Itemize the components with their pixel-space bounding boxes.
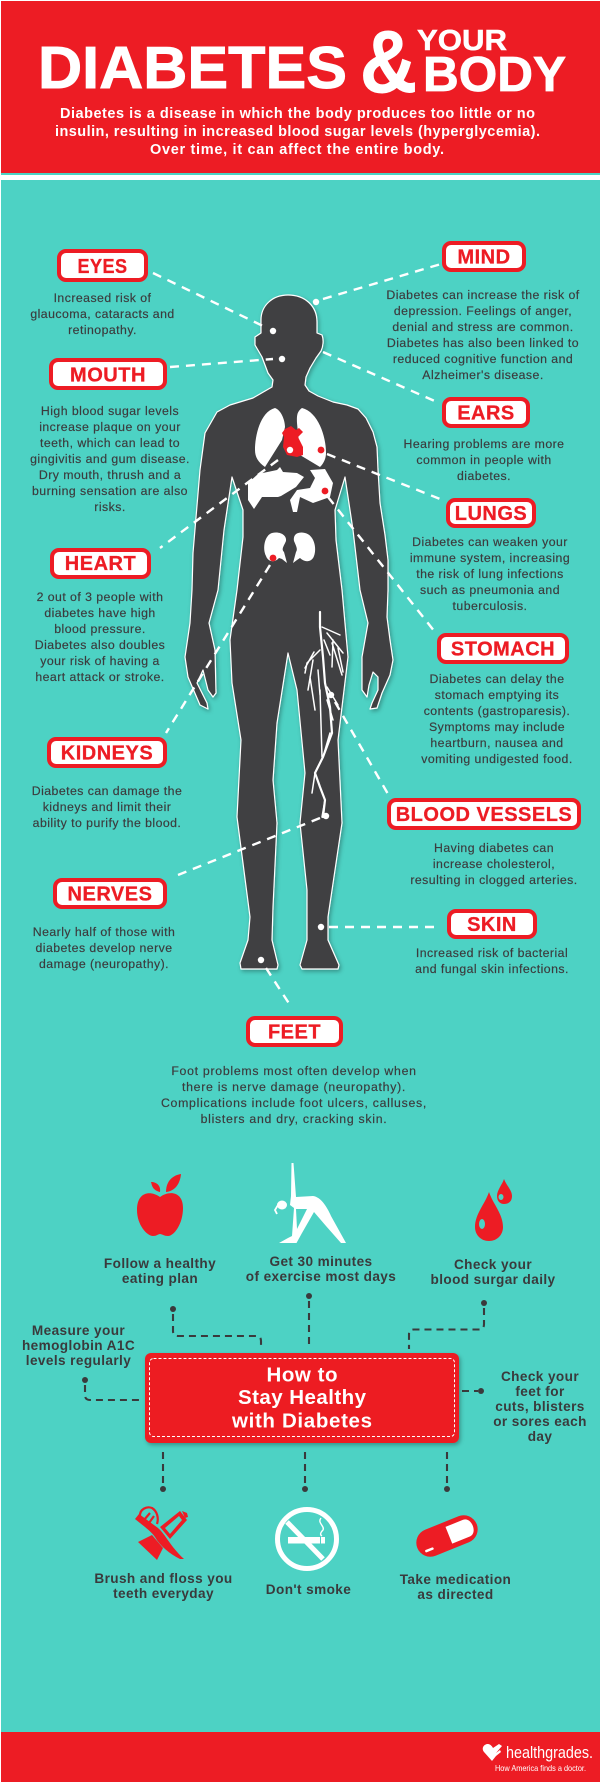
eyes: EYES bbox=[78, 256, 128, 278]
don't smoke text: Don't smoke bbox=[266, 1582, 351, 1597]
blood sugar text: blood surgar daily bbox=[430, 1272, 556, 1287]
nerves: diabetes develop nerve bbox=[35, 941, 173, 955]
mouth: teeth, which can lead to bbox=[40, 436, 180, 450]
lungs bbox=[410, 500, 570, 613]
feet check text: cuts, blisters bbox=[495, 1399, 585, 1414]
heart: your risk of having a bbox=[40, 654, 160, 668]
blood vessels: resulting in clogged arteries. bbox=[410, 873, 578, 887]
feet: FEET bbox=[268, 1022, 321, 1044]
eyes: retinopathy. bbox=[68, 323, 137, 337]
stomach: heartburn, nausea and bbox=[430, 736, 564, 750]
A1C text: levels regularly bbox=[26, 1353, 131, 1368]
heart bbox=[282, 426, 303, 457]
nerves bbox=[33, 880, 175, 971]
feet check text: or sores each bbox=[493, 1414, 587, 1429]
title: BODY bbox=[423, 48, 566, 102]
mouth bbox=[30, 360, 190, 514]
lungs: immune system, increasing bbox=[410, 551, 570, 565]
kidneys bbox=[264, 533, 315, 563]
lungs: such as pneumonia and bbox=[420, 583, 560, 597]
lungs bbox=[255, 408, 326, 467]
icon: toothbrush and toothpaste bbox=[135, 1507, 188, 1560]
feet check text: day bbox=[528, 1429, 552, 1444]
healthy eating text: Follow a healthy bbox=[104, 1256, 216, 1271]
blood vessels: BLOOD VESSELS bbox=[396, 804, 572, 826]
mind: depression. Feelings of anger, bbox=[394, 304, 572, 318]
title: & bbox=[360, 12, 417, 111]
mind: denial and stress are common. bbox=[392, 320, 574, 334]
mouth: gingivitis and gum disease. bbox=[30, 452, 190, 466]
skin bbox=[415, 911, 569, 976]
mouth: Dry mouth, thrush and a bbox=[39, 468, 181, 482]
ears: diabetes. bbox=[457, 469, 511, 483]
title bbox=[38, 12, 566, 111]
blood vessels: Having diabetes can bbox=[434, 841, 554, 855]
mind: Diabetes can increase the risk of bbox=[386, 288, 580, 302]
feet check text: feet for bbox=[515, 1384, 565, 1399]
footer bbox=[1, 1732, 600, 1782]
feet bbox=[161, 1018, 427, 1126]
mouth: burning sensation are also bbox=[32, 484, 188, 498]
medication text: Take medication bbox=[400, 1572, 511, 1587]
feet: Foot problems most often develop when bbox=[171, 1064, 417, 1078]
heart: HEART bbox=[65, 553, 136, 575]
icon: pill bbox=[412, 1511, 482, 1561]
heart: diabetes have high bbox=[44, 606, 156, 620]
ears: EARS bbox=[457, 402, 515, 424]
nerves: NERVES bbox=[68, 884, 152, 906]
A1C text: Measure your bbox=[32, 1323, 125, 1338]
icon: apple bbox=[137, 1174, 183, 1236]
nerves: Nearly half of those with bbox=[33, 925, 175, 939]
stomach: contents (gastroparesis). bbox=[424, 704, 570, 718]
blood vessels: increase cholesterol, bbox=[433, 857, 555, 871]
logo: How America finds a doctor. bbox=[495, 1763, 586, 1773]
heart: Diabetes also doubles bbox=[35, 638, 165, 652]
mouth: MOUTH bbox=[70, 364, 146, 386]
stomach: STOMACH bbox=[451, 638, 555, 660]
header bbox=[1, 1, 600, 180]
feet: there is nerve damage (neuropathy). bbox=[182, 1080, 406, 1094]
lungs: the risk of lung infections bbox=[416, 567, 564, 581]
title: DIABETES bbox=[38, 35, 347, 101]
eyes: Increased risk of bbox=[54, 291, 152, 305]
lungs: LUNGS bbox=[455, 503, 527, 525]
mind: reduced cognitive function and bbox=[393, 352, 573, 366]
feet check text: Check your bbox=[501, 1369, 579, 1384]
heart: heart attack or stroke. bbox=[35, 670, 165, 684]
body figure bbox=[185, 295, 393, 969]
marker dots bbox=[258, 299, 334, 963]
intro text: Diabetes is a disease in which the body produces too little or no bbox=[60, 106, 535, 122]
kidneys bbox=[32, 739, 182, 830]
mouth: High blood sugar levels bbox=[41, 404, 179, 418]
mouth: increase plaque on your bbox=[39, 420, 181, 434]
stomach bbox=[290, 469, 333, 512]
lungs: tuberculosis. bbox=[453, 599, 527, 613]
intro text: Over time, it can affect the entire body. bbox=[150, 142, 444, 158]
kidneys: KIDNEYS bbox=[61, 742, 153, 764]
mind: Alzheimer's disease. bbox=[422, 368, 544, 382]
kidneys: kidneys and limit their bbox=[43, 800, 171, 814]
kidneys: Diabetes can damage the bbox=[32, 784, 182, 798]
stomach: vomiting undigested food. bbox=[421, 752, 573, 766]
ears: Hearing problems are more bbox=[404, 437, 564, 451]
mind bbox=[386, 243, 580, 382]
blood vessels bbox=[305, 612, 343, 817]
kidneys: ability to purify the blood. bbox=[33, 816, 181, 830]
nerves: damage (neuropathy). bbox=[39, 957, 169, 971]
mind: Diabetes has also been linked to bbox=[387, 336, 579, 350]
mouth: risks. bbox=[94, 500, 126, 514]
healthy eating text: eating plan bbox=[122, 1271, 198, 1286]
stomach: stomach emptying its bbox=[435, 688, 559, 702]
icon: blood drops bbox=[475, 1179, 512, 1241]
logo bbox=[483, 1744, 593, 1773]
intro text: insulin, resulting in increased blood sugar levels (hyperglycemia). bbox=[55, 124, 540, 140]
feet: Complications include foot ulcers, calluses, bbox=[161, 1096, 427, 1110]
blood vessels bbox=[389, 800, 579, 887]
icon: no smoking bbox=[278, 1510, 336, 1568]
brush text: teeth everyday bbox=[113, 1586, 214, 1601]
center panel: how to stay healthy: Stay Healthy bbox=[238, 1386, 367, 1409]
brush text: Brush and floss you bbox=[94, 1571, 233, 1586]
heart: blood pressure. bbox=[54, 622, 146, 636]
heart: 2 out of 3 people with bbox=[37, 590, 163, 604]
title: YOUR bbox=[417, 25, 507, 57]
lungs: Diabetes can weaken your bbox=[412, 535, 568, 549]
ears bbox=[404, 399, 564, 483]
liver bbox=[248, 467, 304, 509]
exercise text: Get 30 minutes bbox=[269, 1254, 373, 1269]
mind: MIND bbox=[457, 246, 511, 268]
exercise text: of exercise most days bbox=[246, 1269, 396, 1284]
center panel: how to stay healthy: How to bbox=[266, 1364, 338, 1386]
eyes: glaucoma, cataracts and bbox=[30, 307, 175, 321]
stomach: Symptoms may include bbox=[429, 720, 565, 734]
center panel: how to stay healthy bbox=[145, 1353, 459, 1443]
stomach bbox=[421, 635, 573, 766]
intro text bbox=[55, 106, 540, 158]
ears: common in people with bbox=[416, 453, 552, 467]
connector lines bbox=[153, 264, 441, 1005]
skin: and fungal skin infections. bbox=[415, 962, 569, 976]
medication text: as directed bbox=[417, 1587, 494, 1602]
icon: yoga figure bbox=[275, 1163, 346, 1243]
heart bbox=[35, 550, 165, 684]
A1C text: hemoglobin A1C bbox=[22, 1338, 135, 1353]
skin: Increased risk of bacterial bbox=[416, 946, 568, 960]
blood sugar text: Check your bbox=[454, 1257, 532, 1272]
stomach: Diabetes can delay the bbox=[429, 672, 565, 686]
skin: SKIN bbox=[467, 914, 517, 936]
center panel: how to stay healthy: with Diabetes bbox=[231, 1410, 372, 1432]
feet: blisters and dry, cracking skin. bbox=[201, 1112, 387, 1126]
eyes bbox=[30, 251, 175, 337]
dashed connectors bbox=[82, 1293, 487, 1492]
